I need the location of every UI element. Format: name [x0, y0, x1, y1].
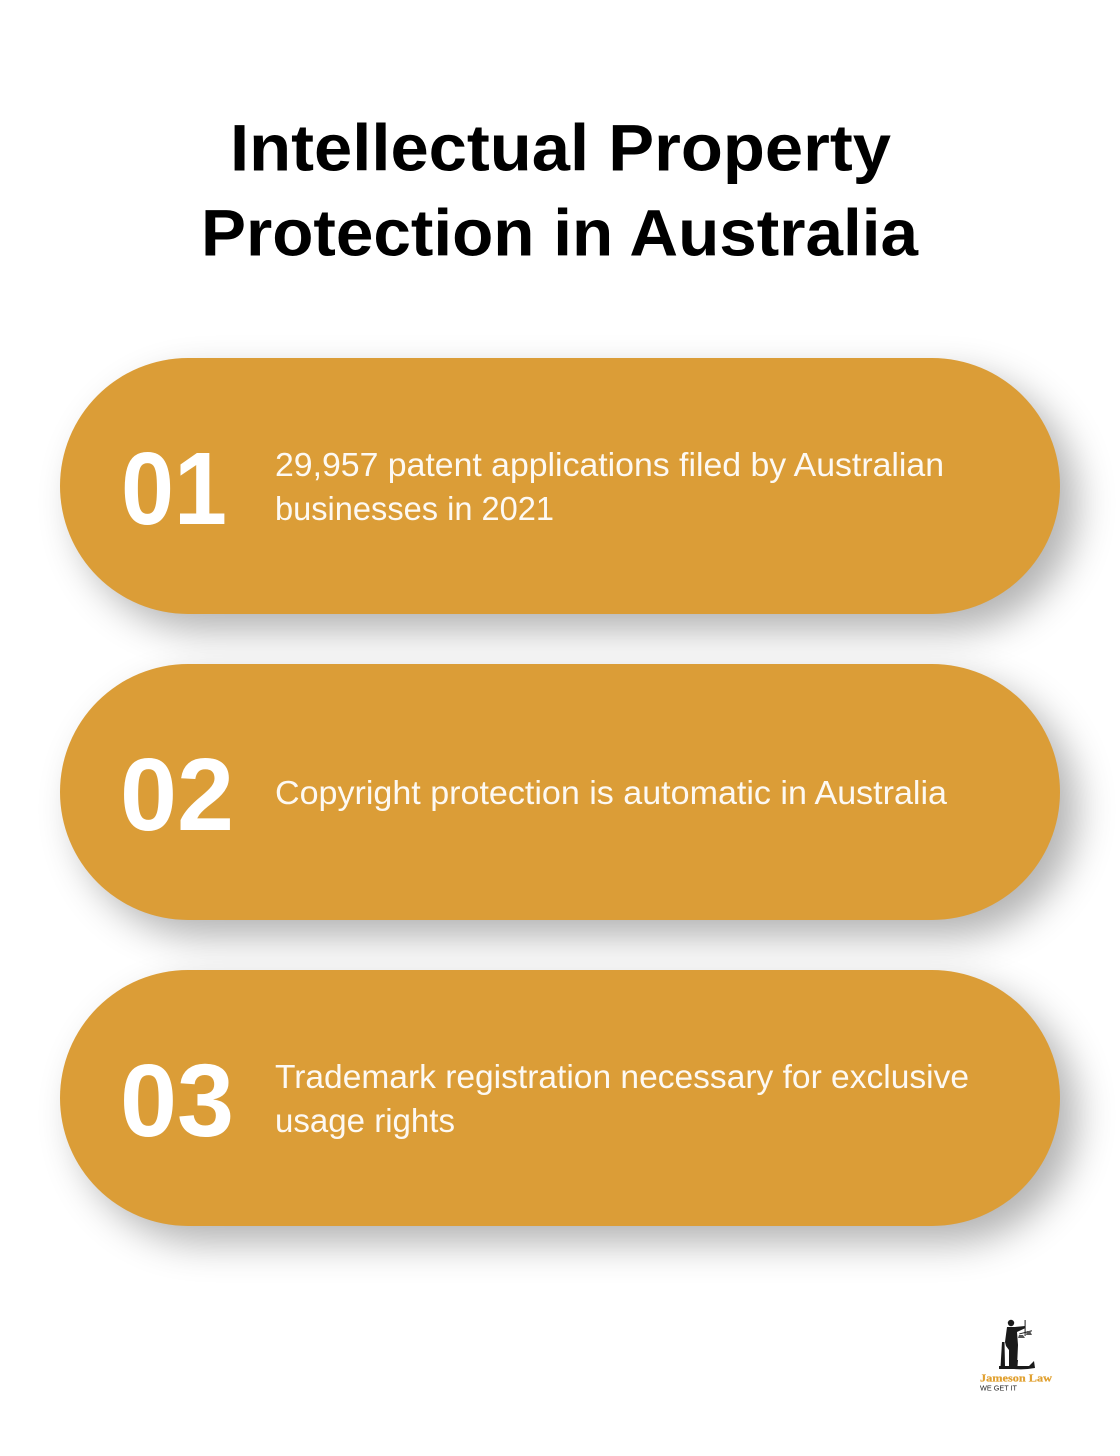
text: copyright: Copyright protection is automatic in Australia — [275, 774, 948, 811]
text: patent applications: 29,957 patent applications filed by Australian — [275, 446, 944, 483]
number 03: 03 — [120, 1043, 234, 1158]
panel: patent applications: businesses in 2021 — [275, 490, 554, 527]
panel: trademark: usage rights — [275, 1102, 455, 1139]
panel: copyright — [60, 664, 1060, 920]
panel: trademark — [60, 970, 1060, 1226]
logo tagline: WE GET IT — [980, 1386, 1018, 1392]
number 01: 01 — [121, 431, 227, 546]
text: trademark: Trademark registration necessary for exclusive — [275, 1058, 969, 1095]
icon: lady justice — [999, 1320, 1035, 1369]
logo name: Jameson Law — [980, 1372, 1052, 1384]
title — [201, 110, 919, 270]
number 02: 02 — [120, 737, 234, 852]
panel: patent applications — [60, 358, 1060, 614]
title: Protection in Australia — [201, 196, 919, 270]
title: Intellectual Property — [230, 110, 891, 184]
